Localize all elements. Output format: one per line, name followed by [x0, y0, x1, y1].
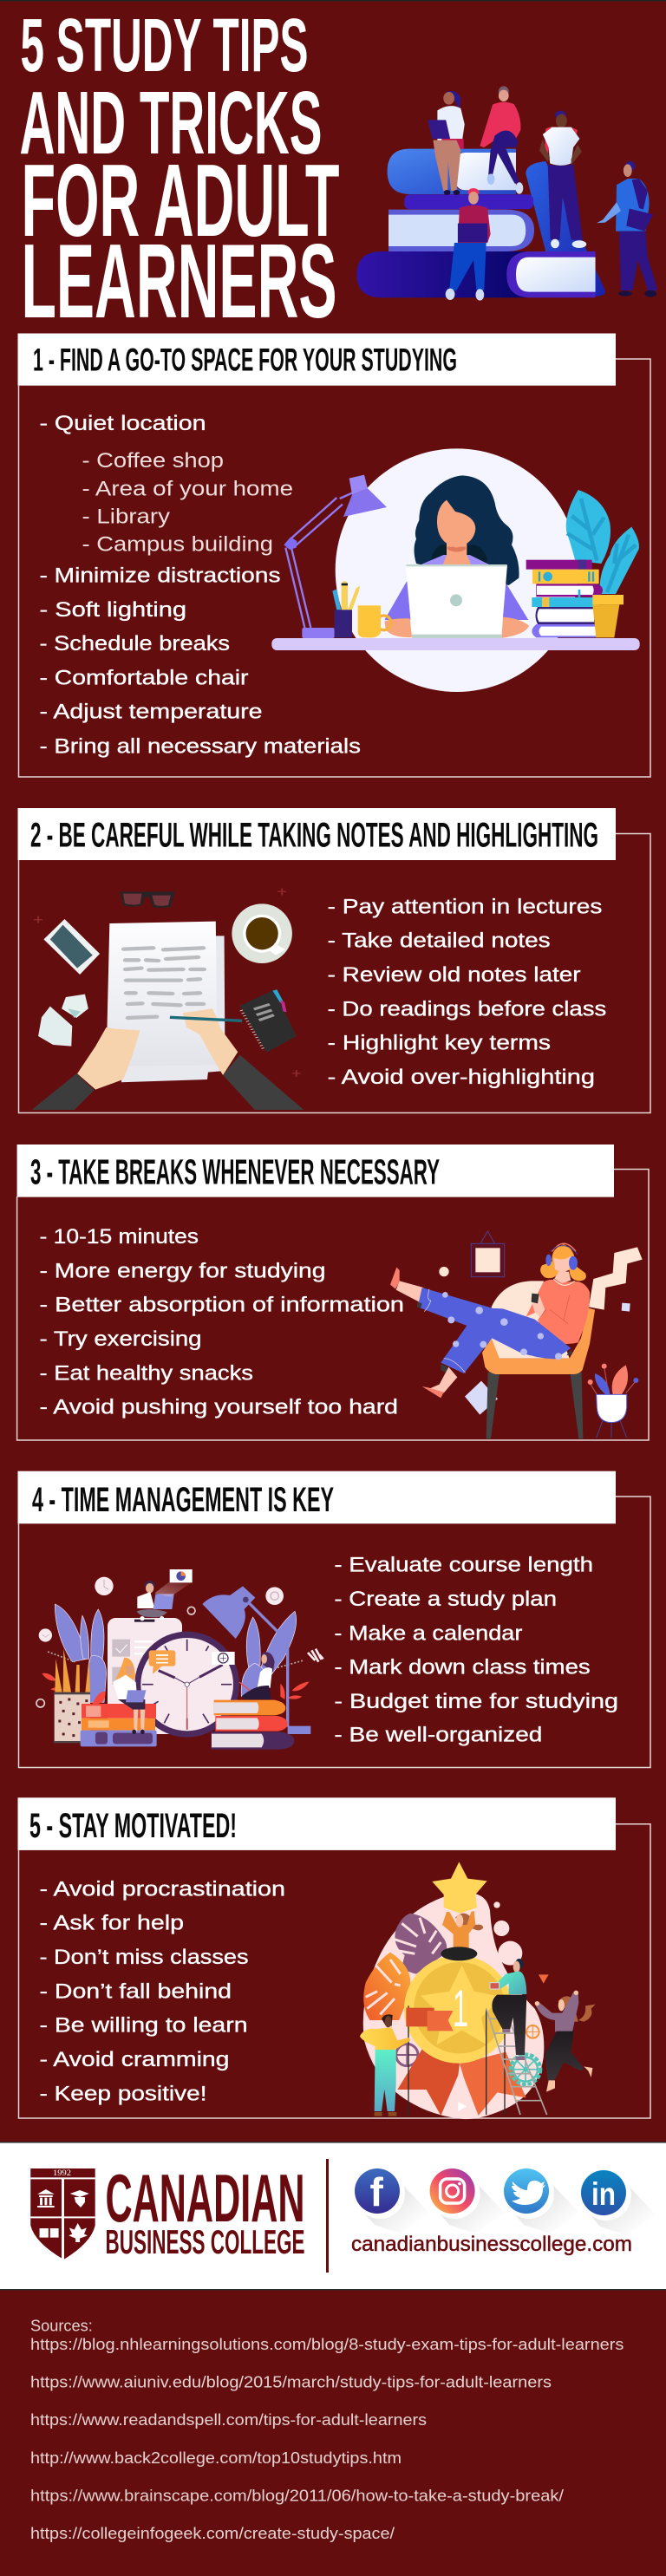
section heading: 5 - STAY MOTIVATED! — [29, 1807, 237, 1845]
headphones — [545, 1243, 578, 1270]
student: sitting with laptop — [446, 188, 491, 301]
list: section 4 tips: - Create a study plan — [334, 1588, 557, 1611]
band top edge — [0, 2142, 666, 2143]
back trouser leg — [418, 1288, 494, 1329]
section heading — [17, 1471, 616, 1523]
medal number: 1 — [453, 1979, 468, 2038]
list: section 4 tips: - Mark down class times — [334, 1656, 591, 1679]
ribbon — [397, 2049, 526, 2116]
illustration: woman at desk — [271, 448, 640, 692]
woman on top — [441, 1911, 483, 1960]
glasses — [120, 891, 175, 908]
sources block: Sources: — [30, 2317, 93, 2334]
clock — [134, 1632, 239, 1738]
icon: instagram — [430, 2168, 505, 2234]
wall dot — [439, 1267, 449, 1276]
panel: section 3 — [17, 1145, 649, 1440]
panel frame — [19, 1824, 650, 2118]
sweater arm line — [538, 1295, 570, 1324]
icon: graduate — [70, 2190, 89, 2208]
orange leaf — [363, 1953, 410, 2020]
medal — [404, 1955, 513, 2064]
pink blob — [363, 1893, 544, 2119]
notebook — [240, 989, 297, 1053]
teal gear — [511, 2054, 540, 2084]
list: section 1 tips: - Adjust temperature — [40, 701, 262, 724]
sources block: http://www.back2college.com/top10studytips.htm — [30, 2449, 402, 2467]
desk — [271, 638, 640, 650]
plant — [566, 490, 639, 594]
title — [19, 3, 340, 340]
wall zigzag — [589, 1247, 643, 1310]
list: section 3 tips: - Avoid pushing yourself too hard — [40, 1396, 398, 1419]
title: FOR ADULT — [21, 143, 340, 258]
sources block: https://www.readandspell.com/tips-for-adult-learners — [30, 2411, 427, 2429]
chair seat — [482, 1308, 595, 1374]
section heading — [17, 1145, 614, 1197]
raised foot — [396, 1281, 423, 1302]
lower shoe — [422, 1386, 444, 1398]
list: section 5 tips: - Avoid cramming — [40, 2048, 229, 2071]
woman shirt — [384, 555, 528, 620]
floating clock — [95, 1577, 114, 1595]
website: canadianbusinesscollege.com — [351, 2233, 632, 2256]
list: section 1 tips: - Bring all necessary materials — [40, 734, 361, 758]
face — [553, 1255, 571, 1272]
book stack — [526, 560, 603, 637]
pencils — [55, 1649, 90, 1692]
band bottom edge — [0, 2289, 666, 2291]
college name: CANADIAN — [106, 2160, 305, 2236]
list: section 1 tips: - Library — [82, 505, 170, 529]
panel frame — [19, 359, 650, 777]
list: section 3 tips: - 10-15 minutes — [40, 1225, 199, 1249]
trouser dots — [442, 1292, 562, 1360]
list: section 1 tips: - Comfortable chair — [40, 666, 248, 689]
woman face — [437, 500, 475, 548]
woman hair — [414, 475, 519, 585]
red leaves — [42, 1673, 310, 1704]
icon: linkedin: in — [591, 2176, 616, 2212]
floating gear — [265, 1587, 284, 1605]
list: section 2 tips: - Pay attention in lectures — [328, 895, 602, 918]
list: section 4 tips: - Budget time for studying — [334, 1690, 618, 1713]
bubbles — [493, 1901, 522, 1966]
list: section 2 tips: - Avoid over-highlighting — [328, 1066, 595, 1089]
woman on left books — [113, 1658, 146, 1734]
student: walking with folder — [597, 161, 657, 297]
laptop — [406, 564, 507, 638]
chair legs — [486, 1373, 583, 1438]
collar — [553, 1279, 575, 1285]
lamp — [202, 1586, 310, 1734]
white play triangle — [458, 2102, 467, 2111]
title: AND TRICKS — [19, 73, 323, 173]
right books — [211, 1700, 294, 1750]
divider line — [326, 2159, 329, 2273]
right hand — [183, 1008, 238, 1075]
list: section 2 tips: - Review old notes later — [328, 963, 581, 987]
list: section 1 tips: - Schedule breaks — [40, 632, 230, 655]
illustration: students on books — [356, 86, 657, 301]
back sheets — [119, 936, 225, 1082]
section heading: 4 - TIME MANAGEMENT IS KEY — [32, 1481, 334, 1519]
panel frame — [19, 834, 650, 1113]
thin purple book — [404, 194, 533, 209]
logo shield — [30, 2168, 95, 2260]
chat bubble — [149, 1650, 175, 1674]
phone — [532, 1294, 539, 1303]
panel: section 4 — [17, 1471, 650, 1767]
top blue book — [388, 149, 516, 194]
woman jumping — [535, 1991, 596, 2092]
white band — [0, 2142, 666, 2289]
man with laptop — [137, 1569, 193, 1621]
title: LEARNERS — [21, 222, 336, 340]
cuff stitching — [424, 1289, 466, 1373]
left hand — [77, 1027, 140, 1090]
panel: section 5 — [17, 1797, 650, 2119]
list: section 1 tips: - Soft lighting — [40, 598, 186, 622]
sources block: https://www.brainscape.com/blog/2011/06/how-to-take-a-study-break/ — [30, 2488, 564, 2505]
ladder poles — [486, 2009, 505, 2115]
top sheet — [106, 922, 218, 1066]
woman neck — [443, 544, 471, 565]
leaning book — [526, 161, 605, 297]
middle book — [388, 210, 534, 251]
illustration: relaxing with headphones — [390, 1231, 643, 1438]
list: section 2 tips: - Do readings before class — [328, 997, 606, 1021]
list: section 2 tips — [328, 895, 606, 1089]
list: section 1 tips: - Coffee shop — [82, 449, 224, 473]
mug — [358, 605, 391, 637]
bottom right book pages — [516, 258, 596, 292]
student: sitting girl — [428, 91, 465, 195]
shirt collar — [422, 555, 490, 565]
hair — [540, 1244, 586, 1281]
decorative marks — [34, 888, 301, 1077]
inner hair shade — [431, 545, 487, 565]
woman hands — [384, 617, 529, 638]
phone — [43, 919, 100, 975]
right plant leaves — [241, 1611, 297, 1697]
icon: facebook: f — [369, 2169, 383, 2214]
falling paper — [465, 1381, 498, 1415]
panel frame — [19, 1497, 650, 1767]
shield dividers — [30, 2178, 95, 2260]
list: section 5 tips: - Ask for help — [40, 1912, 184, 1935]
front trouser leg — [441, 1308, 571, 1373]
phone — [108, 1618, 182, 1734]
list: section 1 tips — [40, 412, 361, 758]
plant pot — [592, 595, 624, 637]
bottom big book — [356, 251, 526, 297]
purple leaf — [395, 1914, 447, 1974]
shield shape — [30, 2168, 95, 2260]
target icon — [187, 1607, 195, 1614]
phone notch — [134, 1620, 154, 1622]
scribbled notes — [124, 948, 204, 1018]
list: section 5 tips: - Be willing to learn — [40, 2014, 248, 2038]
student: standing with backpack — [539, 111, 586, 248]
crumpled paper — [38, 995, 88, 1047]
wall square — [622, 1303, 630, 1312]
man on ladder — [490, 1959, 526, 2060]
footer: brand band — [0, 2142, 666, 2291]
icon: open book — [40, 2228, 59, 2238]
orange gear — [526, 2025, 540, 2039]
sweater — [526, 1280, 590, 1344]
pen cup — [54, 1692, 90, 1743]
icon: maple leaf — [69, 2223, 88, 2242]
list: section 3 tips: - More energy for studying — [40, 1259, 326, 1282]
list: section 4 tips — [334, 1554, 618, 1747]
bars icon — [308, 1649, 323, 1662]
list: section 1 tips: - Campus building — [82, 532, 273, 557]
icon: building — [37, 2189, 55, 2208]
checklist — [112, 1640, 153, 1685]
icon: twitter — [504, 2168, 579, 2234]
chair back — [492, 1281, 570, 1359]
woman on right books — [239, 1652, 275, 1699]
backdrop circle — [336, 448, 578, 692]
illustration: notes on desk — [32, 888, 304, 1110]
man with flag — [360, 2014, 410, 2116]
list: section 4 tips: - Make a calendar — [334, 1621, 522, 1645]
illustration: clock and study scene — [36, 1569, 323, 1750]
list: section 3 tips: - Eat healthy snacks — [40, 1361, 253, 1385]
panel: section 2 — [17, 808, 650, 1113]
small gear icon — [36, 1699, 44, 1707]
list: section 2 tips: - Take detailed notes — [328, 929, 551, 953]
hand — [531, 1295, 545, 1318]
left plant leaves — [55, 1604, 107, 1702]
icon: linkedin — [581, 2170, 656, 2235]
sources block: https://www.aiuniv.edu/blog/2015/march/study-tips-for-adult-learners — [30, 2374, 552, 2391]
purple gear — [396, 2044, 418, 2066]
coffee — [232, 903, 292, 963]
orange triangle — [539, 1974, 549, 1984]
lower foot — [429, 1367, 457, 1393]
college subtitle: BUSINESS COLLEGE — [106, 2224, 305, 2261]
potted plant — [588, 1364, 638, 1438]
bottom right book — [506, 251, 596, 297]
top book pages — [454, 153, 516, 190]
list: section 5 tips: - Avoid procrastination — [40, 1878, 285, 1901]
list: section 4 tips: - Be well-organized — [334, 1724, 542, 1747]
sprigs — [48, 1652, 304, 1667]
list: section 3 tips — [40, 1225, 404, 1419]
sources block — [30, 2317, 624, 2542]
flag — [406, 2005, 454, 2116]
right sleeve — [223, 1055, 304, 1110]
illustration: medal and team — [360, 1862, 596, 2119]
sources block: https://collegeinfogeek.com/create-study-space/ — [30, 2525, 395, 2542]
student: red sweater — [480, 86, 523, 194]
ladder — [486, 2009, 547, 2115]
list: section 2 tips: - Highlight key terms — [328, 1032, 551, 1055]
icon: facebook — [355, 2168, 429, 2234]
lamp — [284, 475, 387, 638]
list: section 5 tips — [40, 1878, 285, 2105]
picture frame — [471, 1231, 505, 1277]
list: section 1 tips: - Minimize distractions — [40, 564, 281, 588]
shield year: 1992 — [53, 2168, 71, 2177]
list: section 5 tips: - Don’t fall behind — [40, 1979, 232, 2003]
neck — [554, 1272, 571, 1283]
neck shade — [447, 547, 466, 552]
star — [432, 1862, 487, 1914]
list: section 5 tips: - Don’t miss classes — [40, 1946, 248, 1969]
section heading — [17, 333, 616, 386]
title: 5 STUDY TIPS — [21, 3, 309, 88]
pen cup — [332, 581, 360, 637]
top edge — [0, 0, 666, 2]
list: section 3 tips: - Better absorption of information — [40, 1294, 404, 1317]
section heading — [17, 808, 616, 860]
pen — [170, 1017, 242, 1021]
floating check — [39, 1628, 52, 1642]
section heading — [17, 1797, 616, 1850]
middle book pages — [388, 215, 526, 246]
sources block: https://blog.nhlearningsolutions.com/blog/8-study-exam-tips-for-adult-learners — [30, 2336, 624, 2353]
left sleeve — [32, 1073, 95, 1110]
trouser cuffs — [417, 1302, 572, 1373]
list: section 1 tips: - Area of your home — [82, 477, 293, 500]
list: section 1 tips: - Quiet location — [40, 412, 206, 435]
list: section 3 tips: - Try exercising — [40, 1327, 201, 1351]
clock note — [212, 1652, 235, 1665]
panel: section 1 — [17, 333, 650, 777]
raised shoe — [390, 1268, 400, 1289]
left books — [81, 1704, 157, 1746]
panel frame — [17, 1169, 649, 1440]
list: section 4 tips: - Evaluate course length — [334, 1554, 593, 1577]
list: section 5 tips: - Keep positive! — [40, 2082, 207, 2105]
